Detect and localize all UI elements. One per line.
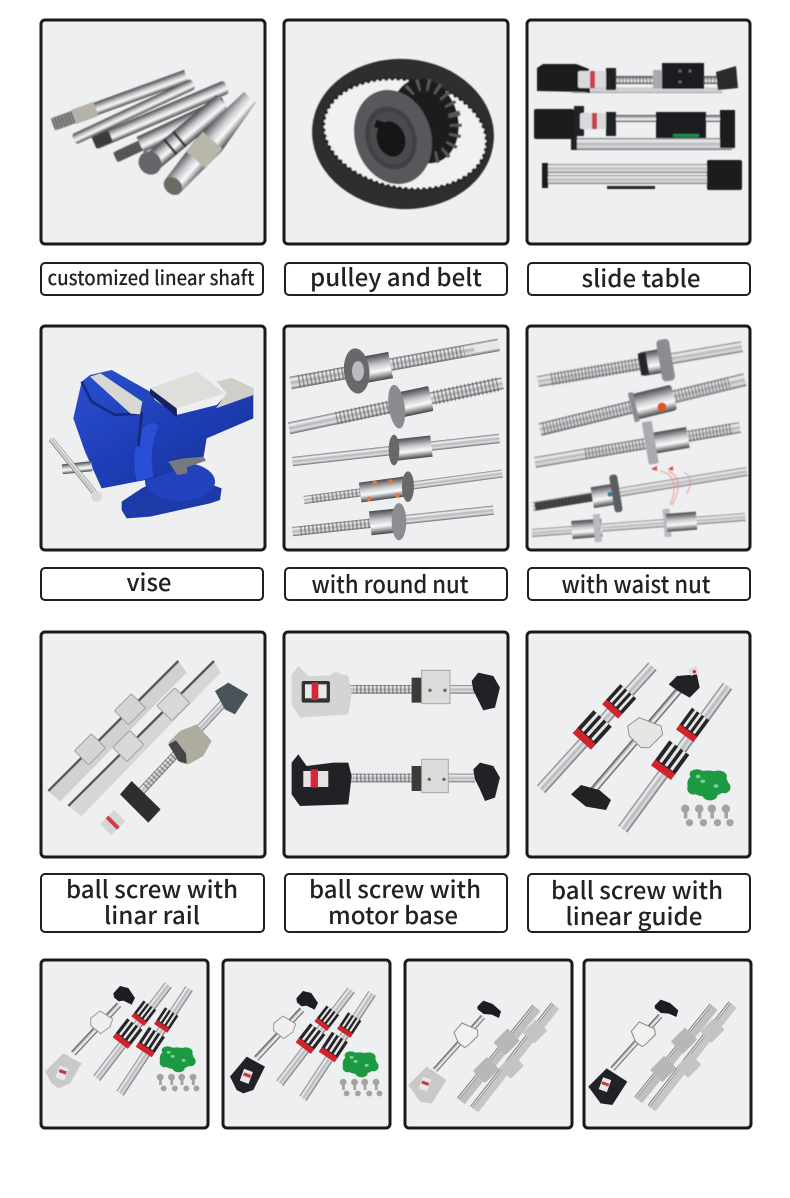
icon: waist nut ball screws: [530, 326, 750, 547]
panel: guide kit with black base: [223, 960, 390, 1128]
panel: ball screw with linear guide: [527, 632, 750, 857]
label: ball screw with linar rail: [41, 870, 264, 932]
icon: blue bench vise: [48, 370, 254, 518]
label: with waist nut: with waist nut: [562, 565, 711, 600]
label: ball screw with motor base: [285, 870, 507, 932]
label: ball screw with linear guide: [528, 871, 750, 932]
panel: SBR kit with silver base: [405, 960, 572, 1128]
label: vise: [41, 563, 263, 600]
label: slide table: slide table: [582, 259, 700, 294]
icon: screw with silver motor base: [292, 666, 500, 718]
panel: SBR kit with black base: [584, 960, 751, 1128]
label: ball screw with linar rail: ball screw with: [66, 870, 238, 905]
label: slide table: [528, 259, 750, 295]
icon: linear guides and screw: [537, 663, 734, 833]
icon: green end caps: [687, 769, 730, 800]
panel: customized linear shaft: [41, 20, 265, 244]
icon: linear shafts: [50, 69, 261, 199]
label: ball screw with linear guide: ball screw with: [551, 871, 723, 906]
icon: orange oil cap: [658, 402, 666, 412]
label: ball screw with linear guide: linear guide: [566, 897, 702, 932]
icon: round nut ball screws: [286, 332, 505, 544]
icon: bolts: [681, 805, 734, 826]
icon: guide kit black: [230, 987, 382, 1101]
label: ball screw with motor base: ball screw with: [309, 870, 481, 905]
panel: with waist nut: [527, 326, 750, 550]
icon: three slide tables: [534, 63, 742, 190]
panel: ball screw with motor base: [284, 632, 508, 857]
icon: timing belt and pulley: [307, 53, 499, 215]
icon: SBR kit silver: [408, 1001, 559, 1112]
arrows: rotation direction: [651, 466, 691, 505]
panel: vise: [41, 326, 265, 550]
icon: guide kit silver: [45, 982, 199, 1096]
label: ball screw with motor base: motor base: [328, 896, 458, 931]
panel: pulley and belt: [284, 20, 508, 244]
label: pulley and belt: pulley and belt: [310, 258, 482, 293]
label: customized linear shaft: customized linear shaft: [48, 262, 255, 291]
label: vise: vise: [126, 563, 172, 598]
icon: SBR rails and screw: [48, 661, 248, 835]
panel: ball screw with linear rail: [41, 632, 265, 857]
icon: SBR kit black: [588, 1000, 737, 1111]
label: ball screw with linar rail: linar rail: [104, 896, 200, 931]
panel: guide kit with silver base: [41, 960, 208, 1128]
panel: with round nut: [284, 326, 508, 550]
icon: screw with black motor base: [292, 754, 500, 806]
panel: slide table: [527, 20, 750, 244]
label: with round nut: with round nut: [312, 565, 469, 600]
